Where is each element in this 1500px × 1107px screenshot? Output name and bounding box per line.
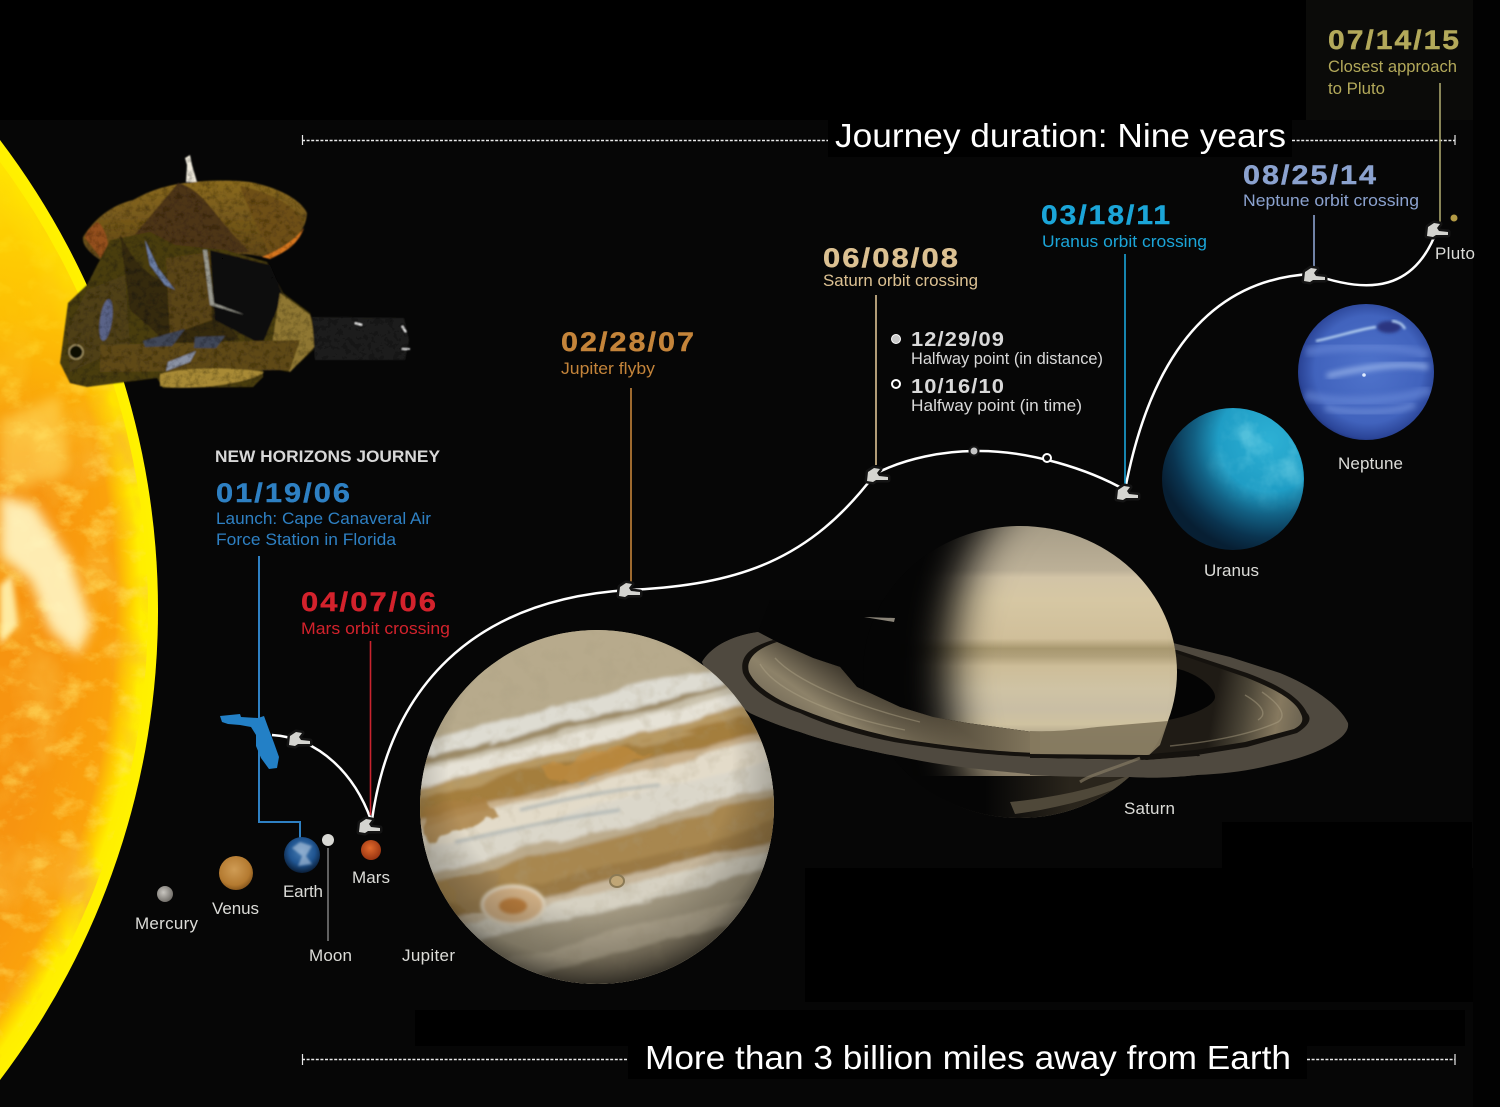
planet shadow on rings <box>758 600 1040 733</box>
icon: florida <box>220 714 279 769</box>
uranus <box>1160 405 1306 551</box>
milestone: mars <box>301 587 450 638</box>
milestone: launch <box>216 478 432 549</box>
milestone: pluto <box>1328 25 1461 98</box>
milestone: launch: Force Station in Florida <box>216 531 397 549</box>
milestone: saturn: 06/08/08 <box>823 243 960 273</box>
planet labels: Saturn <box>1124 799 1175 818</box>
title: top: Journey duration: Nine years <box>835 117 1286 154</box>
front rings: left half, over the shadowed globe <box>702 632 1040 775</box>
milestone: launch: Launch: Cape Canaveral Air <box>216 510 432 528</box>
right ring striations <box>1170 692 1282 746</box>
mars <box>361 840 381 860</box>
milestone: jupiter: Jupiter flyby <box>561 360 656 378</box>
milestone: jupiter <box>561 327 696 378</box>
milestone: uranus: 03/18/11 <box>1041 200 1172 230</box>
heading: NEW HORIZONS JOURNEY <box>215 448 440 466</box>
milestone: uranus: Uranus orbit crossing <box>1042 233 1207 251</box>
trajectory <box>272 230 1437 820</box>
milestone: halfway distance: 12/29/09 <box>911 329 1005 351</box>
Cassini division <box>742 640 1310 759</box>
moon <box>322 834 334 846</box>
planet labels <box>135 244 1475 965</box>
milestone: mars: Mars orbit crossing <box>301 620 450 638</box>
neptune <box>1298 304 1434 440</box>
milestone: halfway distance <box>892 329 1103 368</box>
venus <box>219 856 253 890</box>
milestone: halfway time: 10/16/10 <box>911 376 1005 398</box>
spacecraft: New Horizons <box>60 155 410 388</box>
milestone: uranus <box>1041 200 1207 251</box>
milestone: neptune: Neptune orbit crossing <box>1243 192 1419 210</box>
antenna mast <box>185 155 197 182</box>
globe <box>892 526 1177 818</box>
mottling <box>420 674 770 922</box>
blue-grey streaks <box>455 770 660 842</box>
earth <box>284 837 320 873</box>
planet labels: Uranus <box>1204 561 1259 580</box>
saturn <box>702 526 1348 820</box>
mercury <box>157 886 173 902</box>
bottom: distance: More than 3 billion miles away from Earth <box>645 1039 1291 1076</box>
pluto <box>1450 214 1458 222</box>
bottom: distance <box>302 1039 1455 1079</box>
dish <box>83 180 307 264</box>
milestone: pluto: to Pluto <box>1328 80 1385 98</box>
milestone: pluto: Closest approach <box>1328 58 1457 76</box>
chaotic brown swirl <box>420 795 500 840</box>
bright rings right <box>1150 653 1302 754</box>
duration line <box>302 140 1455 142</box>
milestone: pluto: 07/14/15 <box>1328 25 1461 55</box>
outer ring <box>702 632 1348 778</box>
planet labels: Venus <box>212 899 259 918</box>
spacecraft markers <box>289 223 1448 833</box>
planet labels: Mars <box>352 868 390 887</box>
planet labels: Pluto <box>1435 244 1475 263</box>
milestone: halfway time: Halfway point (in time) <box>911 397 1082 415</box>
small oval <box>610 875 624 887</box>
milestone: jupiter: 02/28/07 <box>561 327 696 357</box>
small planets <box>157 214 1458 902</box>
sun <box>0 140 160 1080</box>
milestone: saturn: Saturn orbit crossing <box>823 272 978 290</box>
planet labels: Jupiter <box>402 946 455 965</box>
milestone: neptune <box>1243 160 1419 210</box>
milestone: halfway time <box>892 376 1082 415</box>
jupiter <box>420 630 774 984</box>
great red spot <box>482 886 544 924</box>
milestone: halfway distance: Halfway point (in distance) <box>911 350 1103 368</box>
planet labels: Mercury <box>135 914 198 933</box>
milestone: saturn <box>823 243 978 290</box>
planet labels: Earth <box>283 882 323 901</box>
ring fragment <box>864 617 895 622</box>
planet labels: Neptune <box>1338 454 1403 473</box>
milestone: mars: 04/07/06 <box>301 587 438 617</box>
milestone: neptune: 08/25/14 <box>1243 160 1378 190</box>
planet labels: Moon <box>309 946 352 965</box>
front rings: over the lit globe <box>1030 721 1168 757</box>
RTG cylinder <box>312 317 409 360</box>
milestone: launch: 01/19/06 <box>216 478 352 508</box>
body <box>60 232 317 388</box>
title: top <box>302 117 1455 157</box>
ring gap <box>1168 668 1215 720</box>
leader lines <box>259 83 1440 941</box>
